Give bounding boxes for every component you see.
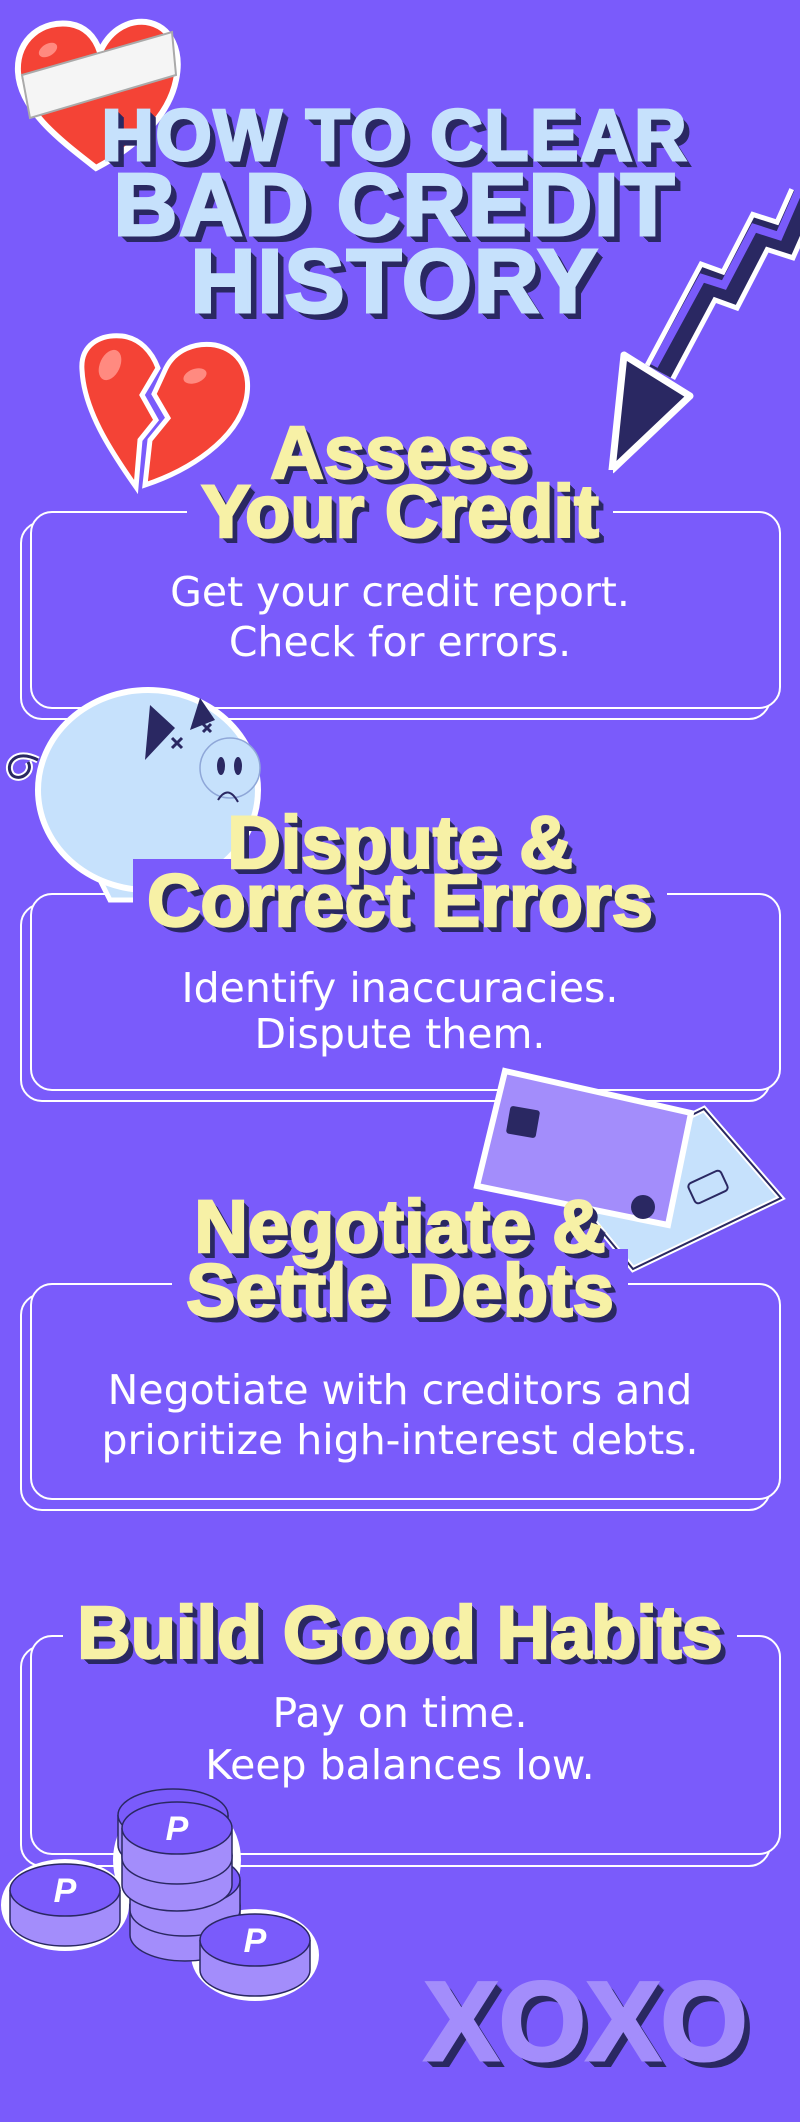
title: HISTORY: [190, 232, 600, 332]
box back: negotiate: [20, 1293, 771, 1511]
box back: habits: [20, 1645, 771, 1867]
text: dispute: [182, 964, 618, 1058]
text: negotiate: [101, 1366, 699, 1464]
box: habits: [30, 1635, 781, 1855]
icon: broken heart: [82, 336, 248, 487]
heading: dispute & correct errors: Correct Errors: [147, 859, 653, 942]
text: assess: Check for errors.: [229, 618, 571, 666]
heading: dispute & correct errors: [133, 801, 667, 942]
box: negotiate: [30, 1283, 781, 1500]
icon: coin stack: P: [166, 1810, 189, 1848]
box back: assess: [20, 521, 771, 720]
icon: coin stack: P: [244, 1922, 267, 1960]
text: assess: Get your credit report.: [170, 568, 630, 616]
icon: zigzag down arrow: [612, 190, 800, 470]
text: negotiate: prioritize high-interest debts.: [101, 1416, 699, 1464]
icon: piggy bank: [9, 690, 260, 900]
heading: negotiate & settle debts: Negotiate &: [194, 1185, 606, 1268]
heading: negotiate & settle debts: [172, 1185, 628, 1332]
text: habits: [205, 1689, 595, 1789]
text: habits: Keep balances low.: [205, 1741, 595, 1789]
heading: assess your credit: Assess: [270, 411, 530, 494]
text: assess: [170, 568, 630, 666]
icon: coin stack: [7, 1789, 313, 1996]
heading: dispute & correct errors: Dispute &: [227, 801, 573, 884]
box back: dispute: [20, 903, 771, 1102]
text: dispute: Identify inaccuracies.: [182, 964, 618, 1012]
heading: negotiate & settle debts: Settle Debts: [186, 1249, 614, 1332]
box: assess: [30, 511, 781, 709]
title: BAD CREDIT: [114, 155, 676, 254]
heading: assess your credit: [187, 411, 613, 553]
heading: assess your credit: Your Credit: [201, 470, 599, 553]
logo: XOXO: XOXO: [424, 1959, 748, 2084]
icon: credit cards: [477, 1071, 781, 1269]
title: HOW TO CLEAR: [102, 96, 688, 176]
text: habits: Pay on time.: [272, 1689, 528, 1737]
box: dispute: [30, 893, 781, 1091]
heading: build good habits: Build Good Habits: [77, 1591, 723, 1674]
icon: coin stack: P: [54, 1872, 77, 1910]
icon: bandaged heart: [18, 22, 178, 168]
text: dispute: Dispute them.: [255, 1010, 545, 1058]
title: [102, 96, 692, 332]
text: negotiate: Negotiate with creditors and: [108, 1366, 692, 1414]
